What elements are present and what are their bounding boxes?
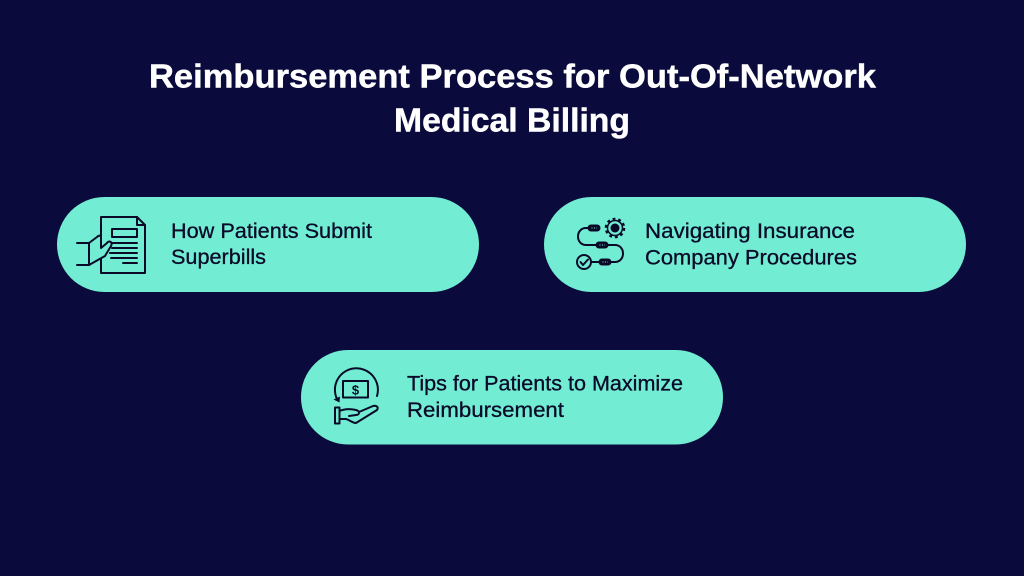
icon: hand receiving money: $ [352,382,360,398]
title: Reimbursement Process for Out-Of-Network [149,58,877,94]
label: How Patients Submit [171,220,372,243]
icon: process path with gear and check [577,219,624,269]
label: Reimbursement [407,399,564,422]
icon: hand holding document [77,217,145,273]
label [171,220,372,269]
panel: navigating insurance company procedures [544,197,966,292]
label: Company Procedures [645,246,857,270]
label: Navigating Insurance [645,220,855,243]
label [645,220,857,270]
panel: tips for patients to maximize reimbursement [301,350,723,444]
icon: hand receiving money [334,368,378,424]
title [149,58,877,138]
label: Tips for Patients to Maximize [407,372,683,396]
label [407,372,683,422]
panel: how patients submit superbills [57,197,479,292]
title: Medical Billing [394,102,630,138]
label: Superbills [171,246,266,269]
